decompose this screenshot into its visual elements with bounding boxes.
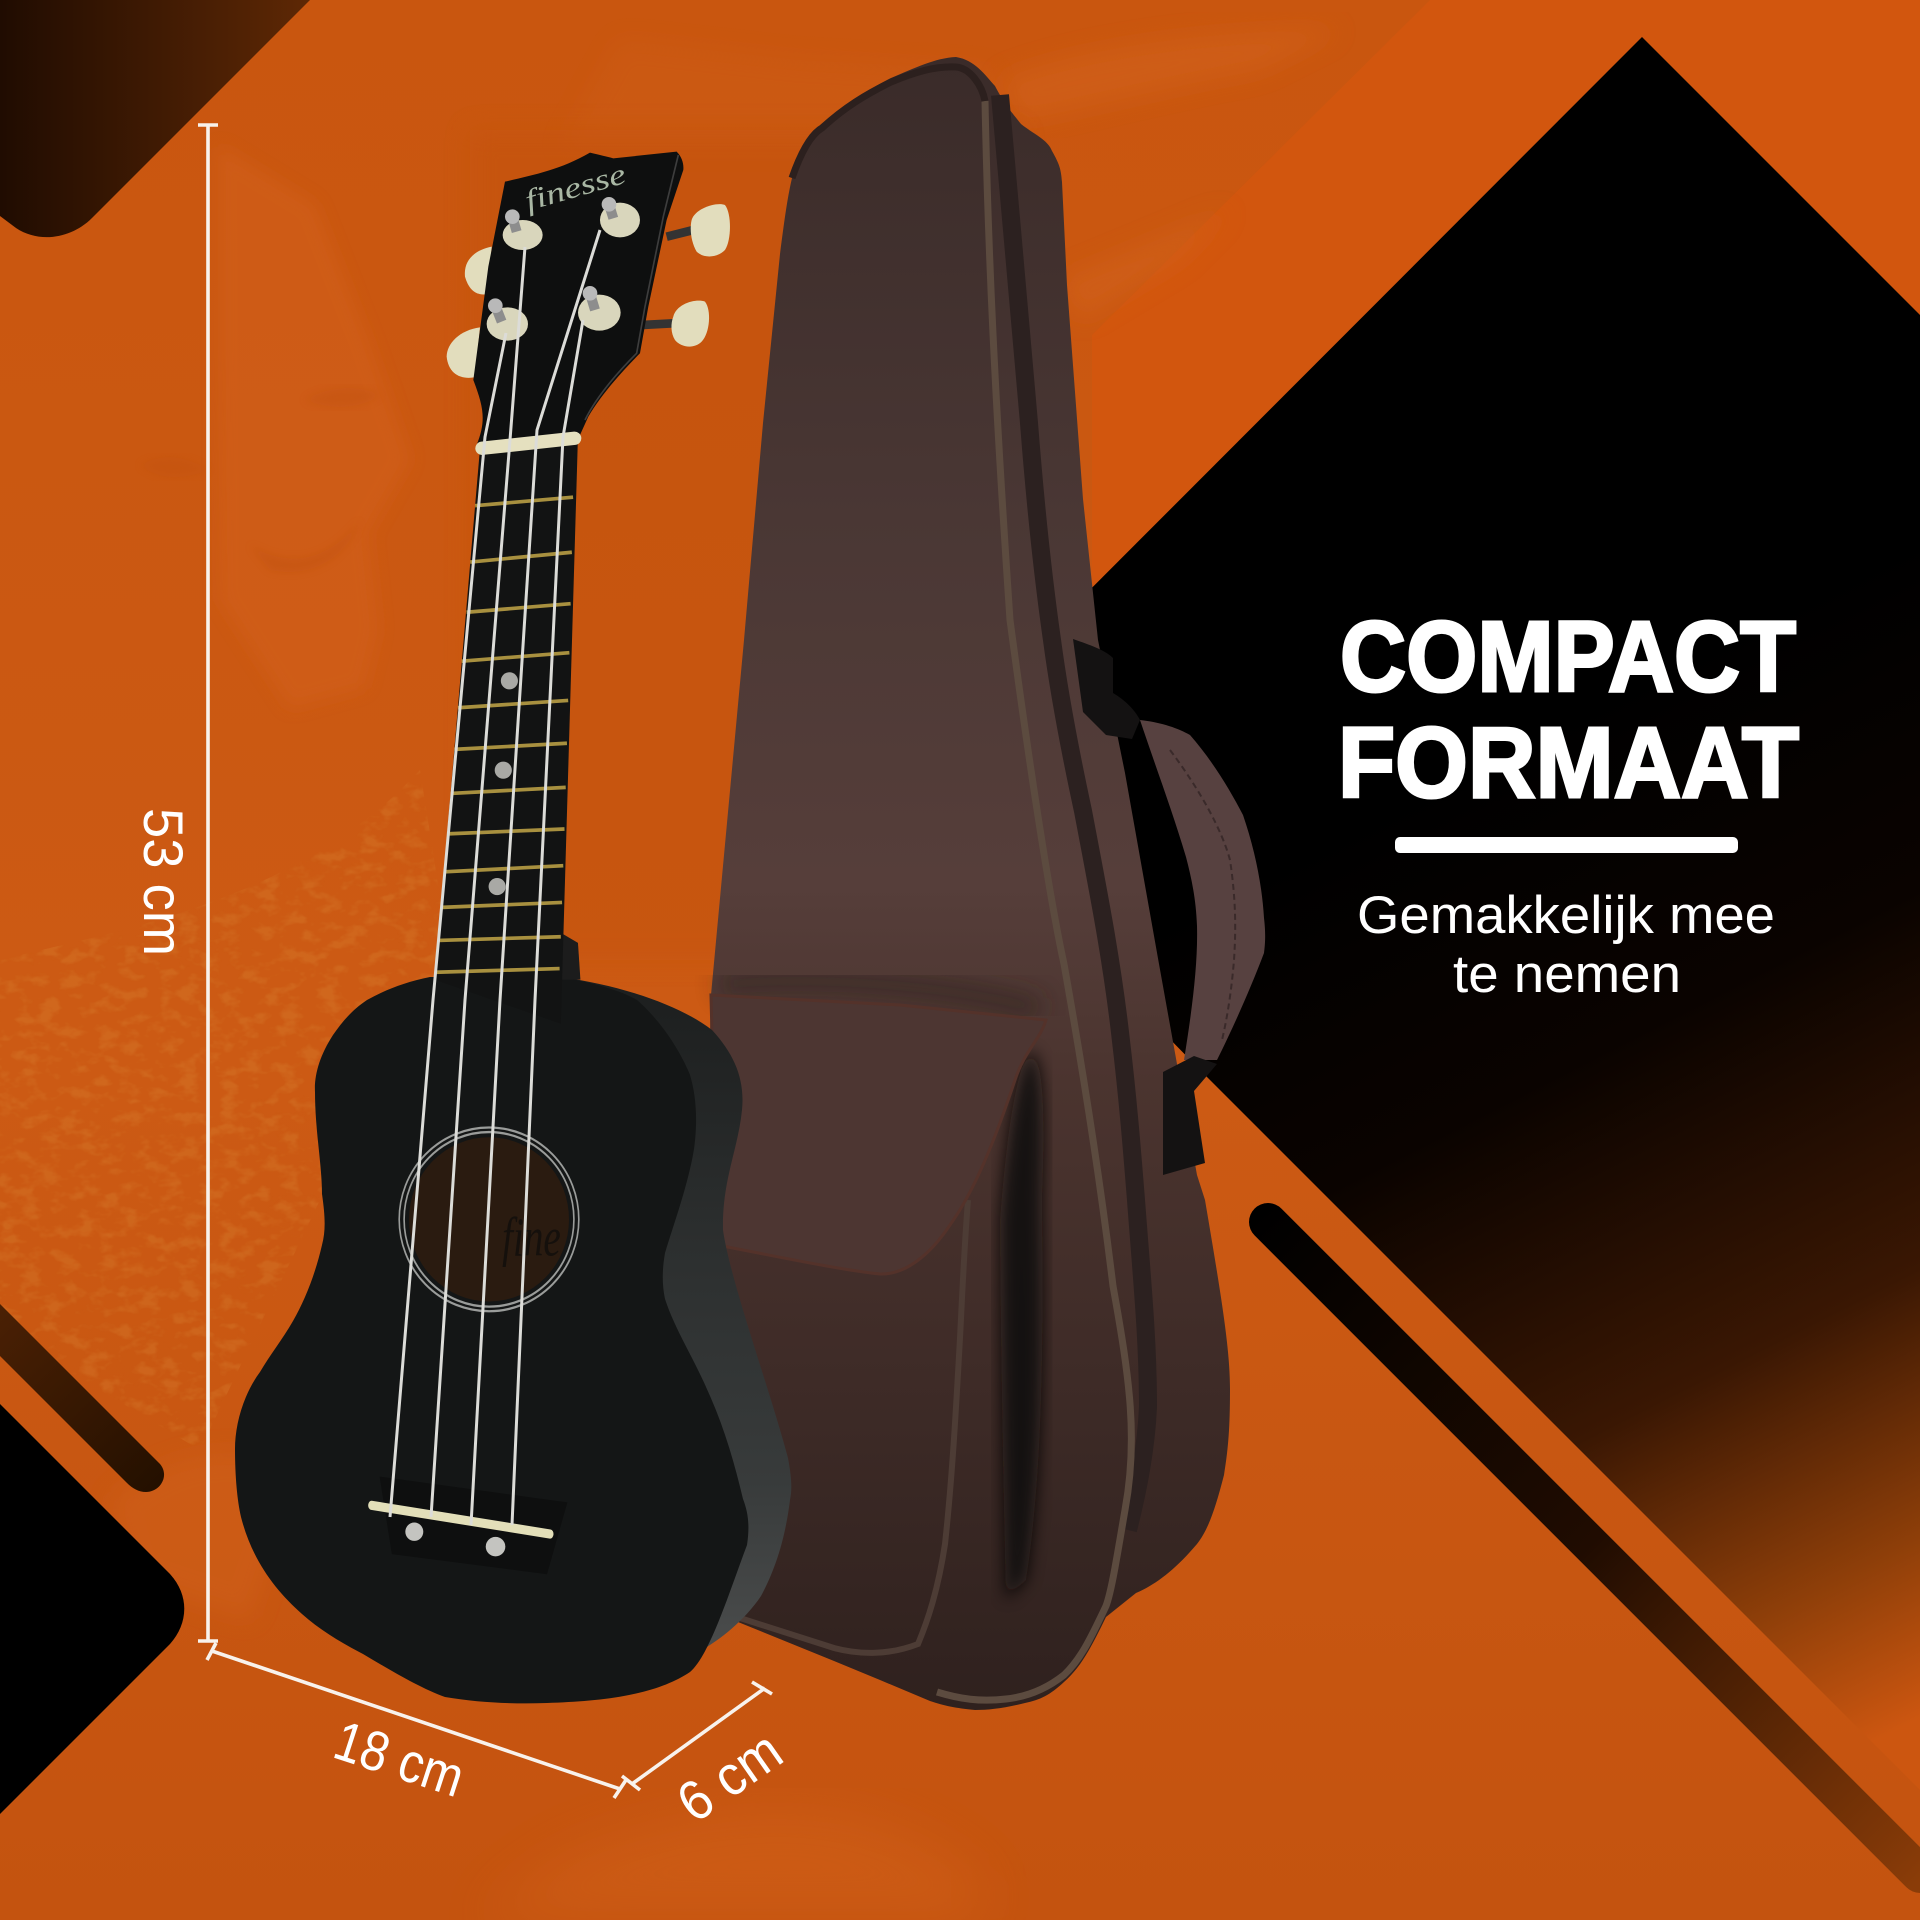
ukulele top — [235, 977, 748, 1703]
frets — [436, 497, 573, 972]
shape: top-left dark corner — [0, 0, 310, 237]
ukulele strings — [390, 230, 600, 1525]
tuner knobs — [447, 204, 730, 378]
dimension: width 18 cm — [207, 1643, 626, 1809]
width label: 18 cm — [327, 1708, 472, 1809]
bag pocket dark gully — [1000, 1050, 1044, 1600]
headstock plate — [473, 152, 683, 445]
ukulele side — [560, 977, 791, 1651]
tuner washers — [487, 203, 640, 341]
bag strap top — [1073, 639, 1140, 739]
ukulele neck — [435, 436, 580, 1024]
height line — [198, 125, 218, 1641]
dimension: depth 6 cm — [622, 1682, 793, 1834]
bag zipper band — [1000, 95, 1148, 1530]
bag handle — [1140, 720, 1265, 1060]
heading: FORMAAT — [1338, 707, 1799, 819]
ukulele — [235, 152, 791, 1703]
bag pocket flap — [711, 995, 1046, 1274]
divider — [1395, 837, 1738, 853]
sound hole — [409, 1137, 569, 1301]
depth label: 6 cm — [665, 1718, 793, 1834]
fretboard — [435, 436, 578, 1024]
headstock edge highlight — [585, 155, 678, 420]
gig bag — [700, 57, 1265, 1710]
bag strap bottom — [1163, 1056, 1217, 1175]
shape: large black diamond — [908, 37, 1920, 1790]
sound hole rosette — [399, 1127, 579, 1311]
bag flap shadow — [720, 981, 1040, 1010]
shape: left diagonal bar — [0, 1304, 164, 1492]
bag piping — [937, 101, 1131, 1700]
headstock — [447, 152, 730, 448]
tuner posts — [495, 204, 613, 322]
background photo: ghosted woman and lace — [0, 0, 1920, 1444]
callout: compact formaat — [1338, 601, 1799, 1004]
bridge plate — [380, 1477, 567, 1574]
subtext: Gemakkelijk mee — [1357, 886, 1775, 945]
subtext — [1357, 886, 1775, 1004]
tuner stems — [643, 230, 693, 325]
sound hole and bridge — [371, 1127, 579, 1574]
bridge saddle — [371, 1505, 550, 1534]
shape: right diagonal bar — [1268, 1222, 1920, 1874]
neck heel — [557, 931, 580, 980]
fret dots — [489, 672, 518, 895]
subtext: te nemen — [1453, 945, 1681, 1004]
bridge pin 2 — [486, 1537, 505, 1556]
heading — [1338, 601, 1799, 819]
logo finesse: finesse — [521, 158, 630, 217]
height label: 53 cm — [132, 808, 195, 956]
shape: bottom-left black triangle — [0, 1404, 184, 1814]
depth line — [622, 1682, 772, 1790]
nut — [482, 438, 575, 448]
dimension: height 53 cm — [132, 125, 218, 1641]
bag top rim shadow — [792, 67, 985, 178]
tuner post caps — [488, 197, 616, 313]
bridge pin 1 — [405, 1523, 423, 1541]
bag body — [700, 57, 1230, 1710]
sound hole label: fine — [502, 1207, 561, 1268]
bag pocket seam — [740, 1200, 968, 1653]
heading: COMPACT — [1340, 601, 1796, 713]
width line — [207, 1643, 626, 1798]
